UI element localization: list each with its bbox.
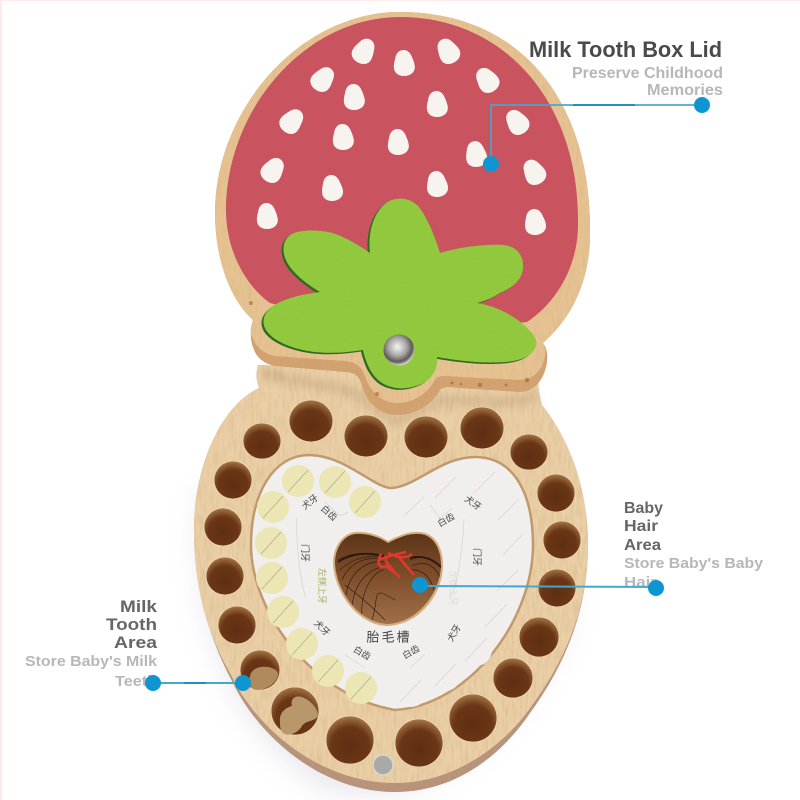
callout: tooth connector: [145, 675, 251, 691]
base wood grain: [190, 355, 592, 785]
callout: lid connector: [483, 97, 710, 172]
lid seeds: [255, 34, 550, 236]
heart tray: [251, 455, 533, 710]
tray labels: 门牙: [300, 544, 311, 562]
label: milk tooth area: Milk: [120, 597, 158, 616]
label: milk tooth box lid: Preserve Childhood: [572, 65, 723, 82]
milk tooth large: [280, 696, 318, 735]
red thread: [379, 552, 414, 577]
pale tooth circles right: [395, 466, 529, 707]
pink painted panel: [226, 17, 578, 335]
lid side band: [215, 12, 590, 415]
label: milk tooth box lid: [529, 37, 723, 99]
label: milk tooth area: [25, 597, 158, 690]
milk tooth small: [249, 667, 278, 690]
tooth circles left: [255, 465, 381, 704]
callout: hair connector: [412, 577, 664, 596]
tray labels: 左侧上牙: [317, 568, 328, 604]
tray labels: [299, 492, 484, 662]
label: baby hair area: Area: [624, 537, 661, 554]
box base: [190, 355, 592, 792]
window rim: [333, 532, 443, 626]
label: milk tooth box lid: Milk Tooth Box Lid: [529, 37, 722, 62]
label: milk tooth area: Area: [114, 633, 158, 652]
metal magnet: [373, 755, 393, 775]
tray labels: 犬牙: [444, 622, 463, 643]
tray labels: 胎毛槽: [366, 630, 412, 644]
baby hair: [338, 553, 442, 620]
tooth holes: [204, 400, 581, 767]
label: baby hair area: Hair: [624, 518, 658, 535]
bracket marks: [297, 502, 464, 668]
felt leaf shadow: [261, 200, 534, 390]
tray labels: 白齿: [400, 642, 421, 661]
lid edge spots: [249, 301, 529, 396]
felt texture: [260, 195, 540, 391]
shadow of lid on base: [262, 372, 538, 422]
lid wood grain: [218, 44, 544, 394]
tray labels: 门牙: [472, 548, 483, 566]
label: milk tooth area: Teeth: [115, 673, 157, 690]
tray labels: 左侧上牙: [448, 570, 459, 606]
hair window: [333, 532, 443, 626]
tray labels: 犬牙: [463, 493, 484, 512]
heart paper: [251, 455, 533, 710]
base top face: [194, 365, 588, 783]
base side edge: [194, 365, 588, 792]
label: baby hair area: [624, 500, 764, 591]
tray labels: 白齿: [352, 643, 373, 662]
tray labels: 犬牙: [299, 492, 320, 511]
label: milk tooth area: Store Baby's Milk: [25, 653, 158, 670]
felt leaf: [263, 199, 536, 388]
top edge tint: [0, 0, 800, 1]
tooth lines right: [400, 472, 523, 702]
lid top face: [215, 12, 590, 403]
box lid: [212, 10, 592, 418]
left edge tint: [0, 0, 2, 800]
tray labels: 犬牙: [312, 617, 333, 638]
label: baby hair area: Store Baby's Baby: [624, 555, 764, 572]
label: milk tooth box lid: Memories: [647, 82, 723, 99]
drop shadow of box: [200, 486, 568, 795]
label: baby hair area: Baby: [624, 500, 663, 517]
window interior: [335, 534, 441, 624]
tray labels: 白齿: [319, 503, 340, 523]
label: milk tooth area: Tooth: [106, 615, 157, 634]
tray labels: 白齿: [435, 510, 456, 529]
label: baby hair area: Hair: [624, 574, 657, 591]
silver rivet: [384, 334, 414, 366]
